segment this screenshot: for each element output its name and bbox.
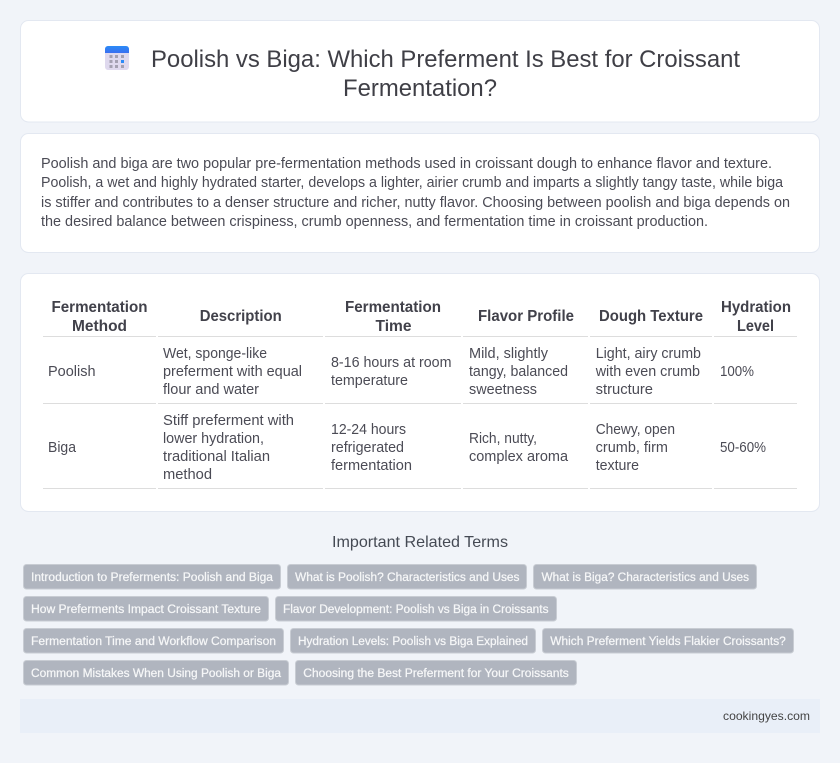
- header: fermentation method: [52, 299, 148, 335]
- cell: poolish description: preferment with equal: [163, 364, 302, 380]
- table row: biga: [48, 413, 766, 483]
- panel: title card: [20, 20, 820, 122]
- cell: biga texture: Chewy, open: [596, 422, 675, 438]
- cell: biga texture: crumb, firm: [596, 440, 668, 456]
- cell: biga time: refrigerated: [331, 440, 404, 456]
- footer site name: cookingyes.com: [723, 709, 810, 723]
- header: hydration level: [721, 299, 791, 335]
- intro paragraph: is stiffer and contributes to a denser structure and richer, nutty flavor. Choosing between poolish and biga depends on: [41, 195, 790, 211]
- cell: poolish texture: with even crumb: [595, 364, 700, 380]
- cell: poolish texture: structure: [596, 382, 653, 398]
- cell: biga time: [331, 422, 412, 474]
- tag: Fermentation Time and Workflow Comparison: [31, 634, 276, 648]
- header: flavor profile: Flavor Profile: [478, 308, 574, 325]
- tag: Introduction to Preferments: Poolish and Biga: [31, 570, 273, 584]
- header: hydration level: Level: [737, 318, 774, 335]
- tag: [296, 660, 576, 685]
- tag: [24, 596, 268, 621]
- icon: calendar: [105, 46, 129, 70]
- tag: [276, 596, 556, 621]
- tag: What is Poolish? Characteristics and Uses: [295, 570, 520, 584]
- heading: important related terms: Important Related Terms: [332, 534, 508, 551]
- cell: poolish flavor: tangy, balanced: [469, 364, 568, 380]
- cell: biga description: method: [163, 467, 212, 483]
- cell: biga description: traditional Italian: [163, 449, 270, 465]
- cell: biga time: fermentation: [331, 458, 412, 474]
- title: [151, 46, 740, 102]
- table header row: [52, 299, 791, 335]
- title: Fermentation?: [343, 75, 497, 102]
- cell: biga hydration: 50-60%: [720, 440, 766, 456]
- header: dough texture: Dough Texture: [599, 308, 703, 325]
- tag: What is Biga? Characteristics and Uses: [542, 570, 749, 584]
- cell: poolish flavor: sweetness: [469, 382, 537, 398]
- header: fermentation time: [345, 299, 441, 335]
- intro paragraph: Poolish, a wet and highly hydrated starter, develops a lighter, airier crumb and imparts a slightly tangy taste, while biga: [41, 175, 783, 191]
- cell: poolish description: Wet, sponge-like: [163, 346, 267, 362]
- cell: poolish description: flour and water: [163, 382, 259, 398]
- cell: biga time: 12-24 hours: [331, 422, 406, 438]
- tag: [290, 628, 536, 653]
- cell: poolish time: 8-16 hours at room: [331, 355, 452, 371]
- tag: Choosing the Best Preferment for Your Croissants: [303, 666, 569, 680]
- panel: comparison table: [20, 274, 820, 512]
- tag: [288, 564, 526, 589]
- cell: biga description: [163, 413, 294, 483]
- cell: poolish description: [163, 346, 302, 398]
- header: fermentation method: Method: [72, 318, 127, 335]
- tag: [24, 660, 288, 685]
- cell: biga method: Biga: [48, 440, 76, 456]
- panel: introduction: [20, 134, 820, 252]
- tag: Flavor Development: Poolish vs Biga in Croissants: [283, 602, 548, 616]
- tag: Common Mistakes When Using Poolish or Biga: [31, 666, 281, 680]
- cell: poolish flavor: Mild, slightly: [469, 346, 549, 362]
- tag: [534, 564, 756, 589]
- title: Poolish vs Biga: Which Preferment Is Best for Croissant: [151, 46, 740, 73]
- cell: poolish hydration: 100%: [720, 364, 754, 380]
- cell: biga flavor: Rich, nutty,: [469, 431, 537, 447]
- header: description: Description: [200, 308, 282, 325]
- cell: poolish texture: Light, airy crumb: [596, 346, 701, 362]
- cell: biga description: lower hydration,: [163, 431, 264, 447]
- cell: poolish time: temperature: [331, 373, 408, 389]
- cell: poolish texture: [595, 346, 701, 398]
- tag: Hydration Levels: Poolish vs Biga Explained: [298, 634, 528, 648]
- tag: [542, 628, 794, 653]
- intro paragraph: the desired balance between crispiness, crumb openness, and fermentation time in croissant production.: [41, 214, 708, 230]
- related terms tags: [24, 564, 794, 685]
- intro paragraph: [41, 156, 790, 230]
- cell: biga description: Stiff preferment with: [163, 413, 294, 429]
- cell: poolish time: [331, 355, 452, 389]
- table row: poolish: [48, 346, 754, 398]
- tag: How Preferments Impact Croissant Texture: [31, 602, 261, 616]
- tag: Which Preferment Yields Flakier Croissants?: [550, 634, 786, 648]
- header: fermentation time: Fermentation: [345, 299, 441, 316]
- header: fermentation method: Fermentation: [52, 299, 148, 316]
- cell: poolish method: Poolish: [48, 364, 96, 380]
- tag: [24, 564, 280, 589]
- cell: poolish flavor: [469, 346, 568, 398]
- cell: biga texture: [596, 422, 675, 474]
- footer bar: [20, 699, 820, 733]
- cell: biga texture: texture: [596, 458, 639, 474]
- tag: [24, 628, 284, 653]
- intro paragraph: Poolish and biga are two popular pre-fermentation methods used in croissant dough to enhance flavor and texture.: [41, 156, 772, 172]
- header: fermentation time: Time: [376, 318, 412, 335]
- cell: biga flavor: complex aroma: [469, 449, 568, 465]
- header: hydration level: Hydration: [721, 299, 791, 316]
- cell: biga flavor: [469, 431, 568, 465]
